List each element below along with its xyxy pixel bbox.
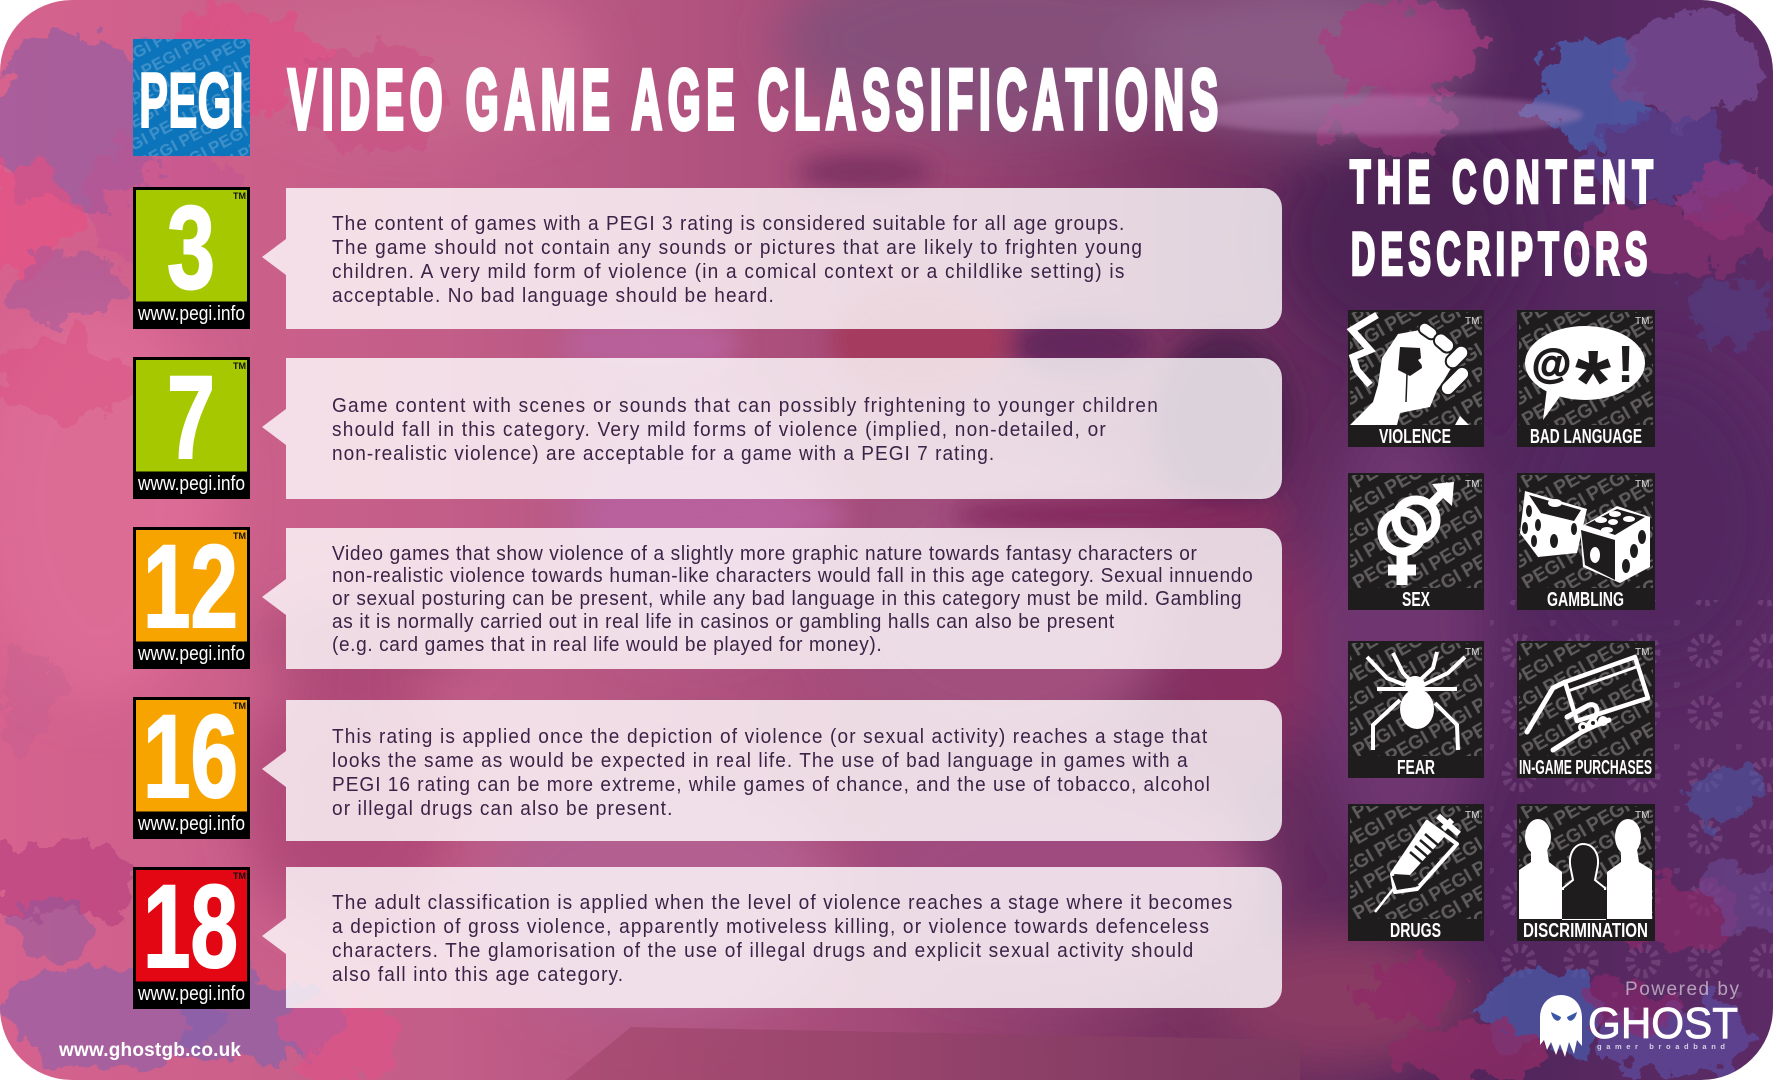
heading: the content descriptors (1350, 149, 1653, 288)
badge: PEGI 3: www.pegi.info (137, 303, 245, 325)
icon: discrimination: TM (1635, 810, 1649, 821)
rating row: PEGI 12 (133, 521, 1282, 669)
description panel: PEGI 3: The content of games with a PEGI 3 rating is considered suitable for all age groups. (332, 212, 1124, 235)
icon: bad language: @ (1532, 342, 1571, 386)
watercolor left (0, 10, 440, 1080)
badge: PEGI 7: 7 (167, 352, 215, 484)
description panel: PEGI 18: characters. The glamorisation of the use of illegal drugs and explicit sexual activity should (332, 939, 1193, 962)
badge: PEGI 18: www.pegi.info (137, 983, 245, 1005)
logo: PEGI (133, 39, 250, 156)
icon: in-game purchases (1517, 641, 1655, 779)
description panel: PEGI 3: The game should not contain any sounds or pictures that are likely to frighten young (332, 236, 1142, 259)
icon: bad language: ! (1617, 336, 1634, 394)
description panel: PEGI 7: non-realistic violence) are acceptable for a game with a PEGI 7 rating. (332, 442, 994, 465)
label: SEX (1402, 589, 1430, 611)
description panel: PEGI 18 (262, 867, 1282, 1008)
icon: discrimination (1517, 804, 1655, 942)
rating row: PEGI 18 (133, 861, 1282, 1009)
logo wordmark: PEGI (139, 58, 244, 144)
patterned fabric (1490, 600, 1773, 1000)
badge: PEGI 12: www.pegi.info (137, 643, 245, 665)
watercolor right (1330, 0, 1773, 1080)
icon: fear: TM (1465, 647, 1479, 658)
badge: PEGI 3 (133, 182, 250, 329)
description panel: PEGI 12: (e.g. card games that in real life would be played for money). (332, 633, 882, 656)
description panel: PEGI 12: Video games that show violence of a slightly more graphic nature towards fantasy characters or (332, 542, 1197, 565)
title: VIDEO GAME AGE CLASSIFICATIONS (288, 54, 1218, 147)
description panel: PEGI 12 (262, 528, 1282, 669)
label: IN-GAME PURCHASES (1519, 757, 1652, 779)
icon: gambling: TM (1635, 479, 1649, 490)
description panel: PEGI 16 (262, 700, 1282, 841)
badge: PEGI 12: TM (233, 531, 246, 541)
website url: www.ghostgb.co.uk (58, 1040, 241, 1061)
badge: PEGI 18: 18 (143, 861, 238, 993)
description panel: PEGI 18: a depiction of gross violence, apparently motiveless killing, or violence towards defenceless (332, 915, 1209, 938)
description panel: PEGI 18: The adult classification is applied when the level of violence reaches a stage where it becomes (332, 891, 1232, 914)
description panel: PEGI 12: or sexual posturing can be present, while any bad language in this category must be mild. Gambling (332, 587, 1242, 610)
label: DRUGS (1390, 920, 1441, 942)
icon: in-game purchases: TM (1635, 647, 1649, 658)
description panel: PEGI 16: This rating is applied once the depiction of violence (or sexual activity) reaches a stage that (332, 725, 1208, 748)
powered by text: Powered by (1625, 979, 1740, 1000)
label: BAD LANGUAGE (1530, 426, 1642, 448)
description panel: PEGI 3: children. A very mild form of violence (in a comical context or a childlike setting) is (332, 260, 1124, 283)
badge: PEGI 16 (133, 691, 250, 839)
badge: PEGI 7 (133, 352, 250, 499)
label: GAMBLING (1547, 589, 1624, 611)
description panel: PEGI 16: looks the same as would be expected in real life. The use of bad language in games with a (332, 749, 1188, 772)
icon: bad language: TM (1635, 316, 1649, 327)
description panel: PEGI 16: or illegal drugs can also be present. (332, 797, 672, 820)
tagline: gamer broadband (1597, 1042, 1725, 1051)
description panel: PEGI 7 (262, 358, 1282, 499)
description panel: PEGI 7: should fall in this category. Very mild forms of violence (implied, non-detailed, or (332, 418, 1106, 441)
badge: PEGI 7: TM (233, 361, 246, 371)
icon: gambling (1517, 473, 1655, 611)
heading: the content descriptors: DESCRIPTORS (1351, 221, 1647, 288)
icon: fear (1348, 641, 1484, 779)
badge: PEGI 16: 16 (143, 691, 238, 823)
description panel: PEGI 3 (262, 188, 1282, 329)
table edge (566, 1027, 1300, 1080)
description panel: PEGI 12: as it is normally carried out in real life in casinos or gambling halls can also be present (332, 610, 1115, 633)
description panel: PEGI 16: PEGI 16 rating can be more extreme, while games of chance, and the use of tobacco, alcohol (332, 773, 1210, 796)
powered by ghost logo (1540, 979, 1740, 1057)
badge: PEGI 16: TM (233, 701, 246, 711)
ghost wordmark: GHOST (1588, 999, 1738, 1048)
icon: violence: TM (1465, 316, 1479, 327)
icon: violence (1348, 310, 1484, 448)
badge: PEGI 12 (133, 521, 250, 669)
label: VIOLENCE (1379, 426, 1451, 448)
rating row: PEGI 3 (133, 182, 1282, 329)
badge: PEGI 7: www.pegi.info (137, 473, 245, 495)
icon: bad language (1517, 310, 1655, 448)
badge: PEGI 18 (133, 861, 250, 1009)
badge: PEGI 12: 12 (143, 521, 238, 653)
description panel: PEGI 12: non-realistic violence towards human-like characters would fall in this age category. Sexual innuendo (332, 564, 1253, 587)
badge: PEGI 16: www.pegi.info (137, 813, 245, 835)
badge: PEGI 3: 3 (167, 182, 215, 314)
heading: the content descriptors: THE CONTENT (1350, 149, 1653, 216)
label: FEAR (1397, 757, 1435, 779)
icon: sex (1348, 473, 1484, 611)
photo: man and child (560, 154, 1295, 535)
icon: drugs (1348, 804, 1484, 942)
icon: ghost (1540, 995, 1582, 1057)
rating row: PEGI 7 (133, 352, 1282, 499)
description panel: PEGI 18: also fall into this age category. (332, 963, 623, 986)
icon: drugs: TM (1465, 810, 1479, 821)
description panel: PEGI 7: Game content with scenes or sounds that can possibly frightening to younger children (332, 394, 1158, 417)
label: DISCRIMINATION (1523, 920, 1648, 942)
lamp (1193, 95, 1583, 135)
description panel: PEGI 3: acceptable. No bad language should be heard. (332, 284, 774, 307)
icon: bad language: * (1575, 333, 1611, 433)
badge: PEGI 18: TM (233, 871, 246, 881)
icon: sex: TM (1465, 479, 1479, 490)
badge: PEGI 3: TM (233, 191, 246, 201)
rating row: PEGI 16 (133, 691, 1282, 841)
